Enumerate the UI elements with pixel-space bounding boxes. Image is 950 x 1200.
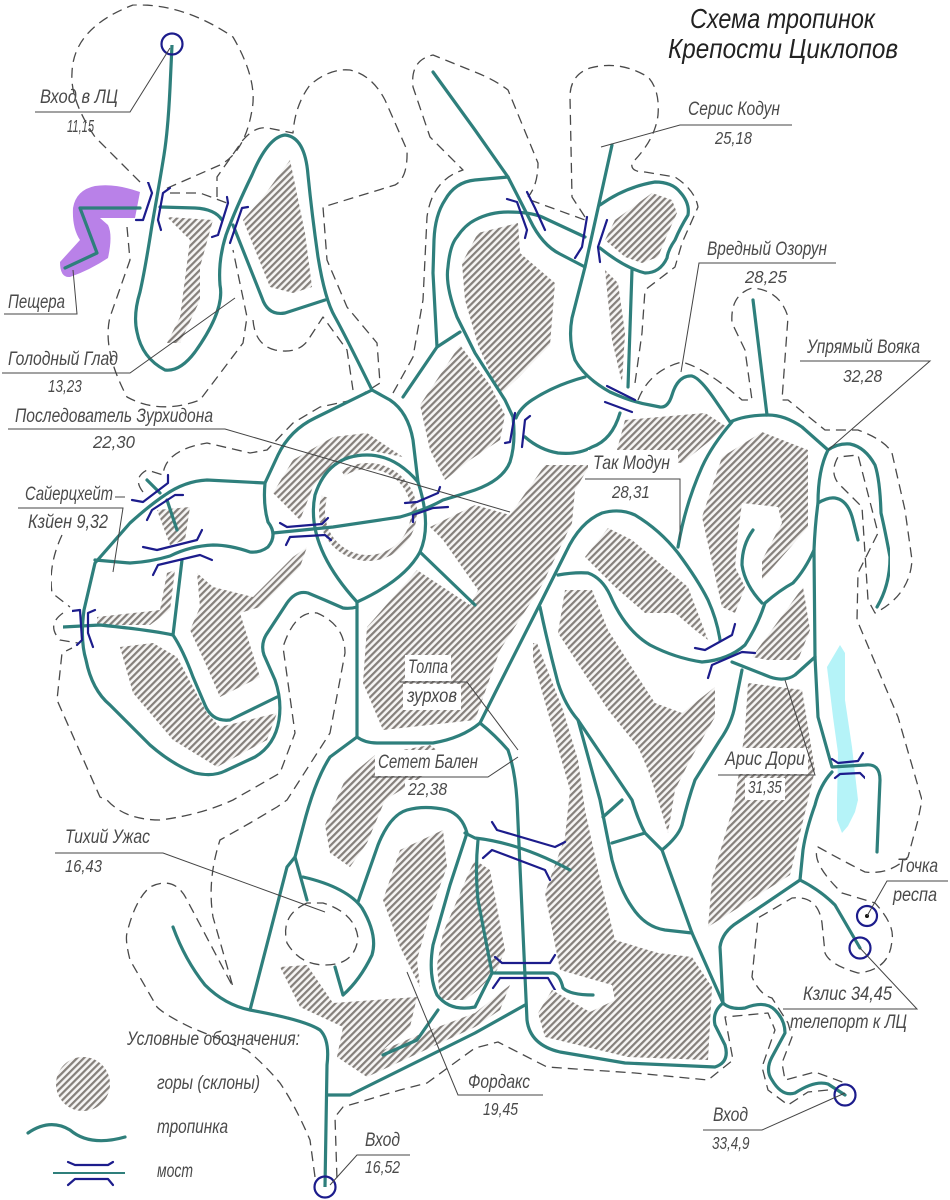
label: Толпа зурхов: зурхов <box>406 686 457 707</box>
label: Так Модун: 28,31 <box>611 482 650 502</box>
legend: мост <box>157 1161 193 1182</box>
label: Упрямый Вояка <box>800 337 930 450</box>
label: Сетет Бален: 22,38 <box>407 779 448 799</box>
label: Вход в ЛЦ <box>35 48 170 137</box>
label: Точка респа: Точка <box>897 856 938 877</box>
label: Сайерцхейт / Кзйен: Кзйен 9,32 <box>28 512 108 533</box>
label: Голодный Глад <box>2 298 235 397</box>
label: Серис Кодун: 25,18 <box>714 129 753 148</box>
label: Последователь Зурхидона <box>8 406 510 512</box>
label: Упрямый Вояка: 32,28 <box>843 366 883 386</box>
title: Крепости Циклопов <box>668 33 898 64</box>
legend: тропинка <box>157 1117 228 1138</box>
label: Пещера <box>4 270 77 314</box>
label: Сайерцхейт / Кзйен <box>18 484 125 572</box>
label: Тихий Ужас: Тихий Ужас <box>65 827 150 848</box>
label: Серис Кодун <box>601 99 792 148</box>
label: Арис Дори <box>718 680 815 800</box>
label: Сайерцхейт / Кзйен: Сайерцхейт <box>25 484 113 505</box>
water stream <box>827 645 858 833</box>
label: Тихий Ужас <box>55 827 325 912</box>
label: Так Модун: Так Модун <box>593 453 670 474</box>
label: Толпа зурхов <box>400 655 518 750</box>
label: Упрямый Вояка: Упрямый Вояка <box>806 337 920 358</box>
label: Точка респа <box>867 856 948 916</box>
label: Серис Кодун: Серис Кодун <box>688 99 780 120</box>
label: Вредный Озорун: 28,25 <box>744 266 787 287</box>
label: Фордакс: 19,45 <box>483 1099 518 1119</box>
label: Вход 33,4,9 <box>703 1093 845 1154</box>
label: Вход 16,52: Вход <box>365 1130 400 1151</box>
label: Вход в ЛЦ: 11,15 <box>67 116 95 137</box>
mountain slopes <box>97 160 815 1077</box>
label: Кзлис телепорт к ЛЦ: Кзлис 34,45 <box>803 984 892 1005</box>
label: Фордакс <box>407 972 543 1119</box>
label: Тихий Ужас: 16,43 <box>65 857 102 876</box>
label: Арис Дори: Арис Дори <box>724 749 805 770</box>
label: Сетет Бален: Сетет Бален <box>378 752 478 773</box>
label: Точка респа: респа <box>892 885 937 906</box>
label: Кзлис телепорт к ЛЦ <box>783 948 917 1033</box>
label: Так Модун <box>585 450 680 540</box>
bridges <box>72 182 865 990</box>
label: Толпа зурхов: Толпа <box>408 657 448 678</box>
label: Вход 33,4,9: 33,4,9 <box>712 1134 750 1154</box>
title: Схема тропинок <box>690 3 876 34</box>
label: Сетет Бален <box>372 750 518 802</box>
legend <box>28 1029 300 1185</box>
label: Вход 16,52 <box>330 1130 410 1185</box>
legend: горы (склоны) <box>157 1073 260 1094</box>
label: Пещера: Пещера <box>8 292 65 313</box>
label: Вредный Озорун <box>681 239 836 372</box>
label: Кзлис телепорт к ЛЦ: телепорт к ЛЦ <box>790 1012 907 1033</box>
label: Фордакс: Фордакс <box>468 1072 530 1093</box>
label: Последователь Зурхидона: 22,30 <box>92 431 135 452</box>
label: Вход в ЛЦ: Вход в ЛЦ <box>40 87 118 108</box>
label: Голодный Глад: Голодный Глад <box>8 349 118 370</box>
label: Вход 16,52: 16,52 <box>365 1157 400 1177</box>
title <box>668 3 898 64</box>
label: Арис Дори: 31,35 <box>748 778 782 798</box>
cave area highlight <box>60 185 140 277</box>
label: Вход 33,4,9: Вход <box>713 1105 748 1126</box>
label: Последователь Зурхидона: Последователь Зурхидона <box>15 406 213 427</box>
legend: Условные обозначения: <box>126 1029 300 1050</box>
portal circles <box>162 34 877 1198</box>
label: Голодный Глад: 13,23 <box>48 377 82 397</box>
label: Вредный Озорун: Вредный Озорун <box>707 239 827 260</box>
